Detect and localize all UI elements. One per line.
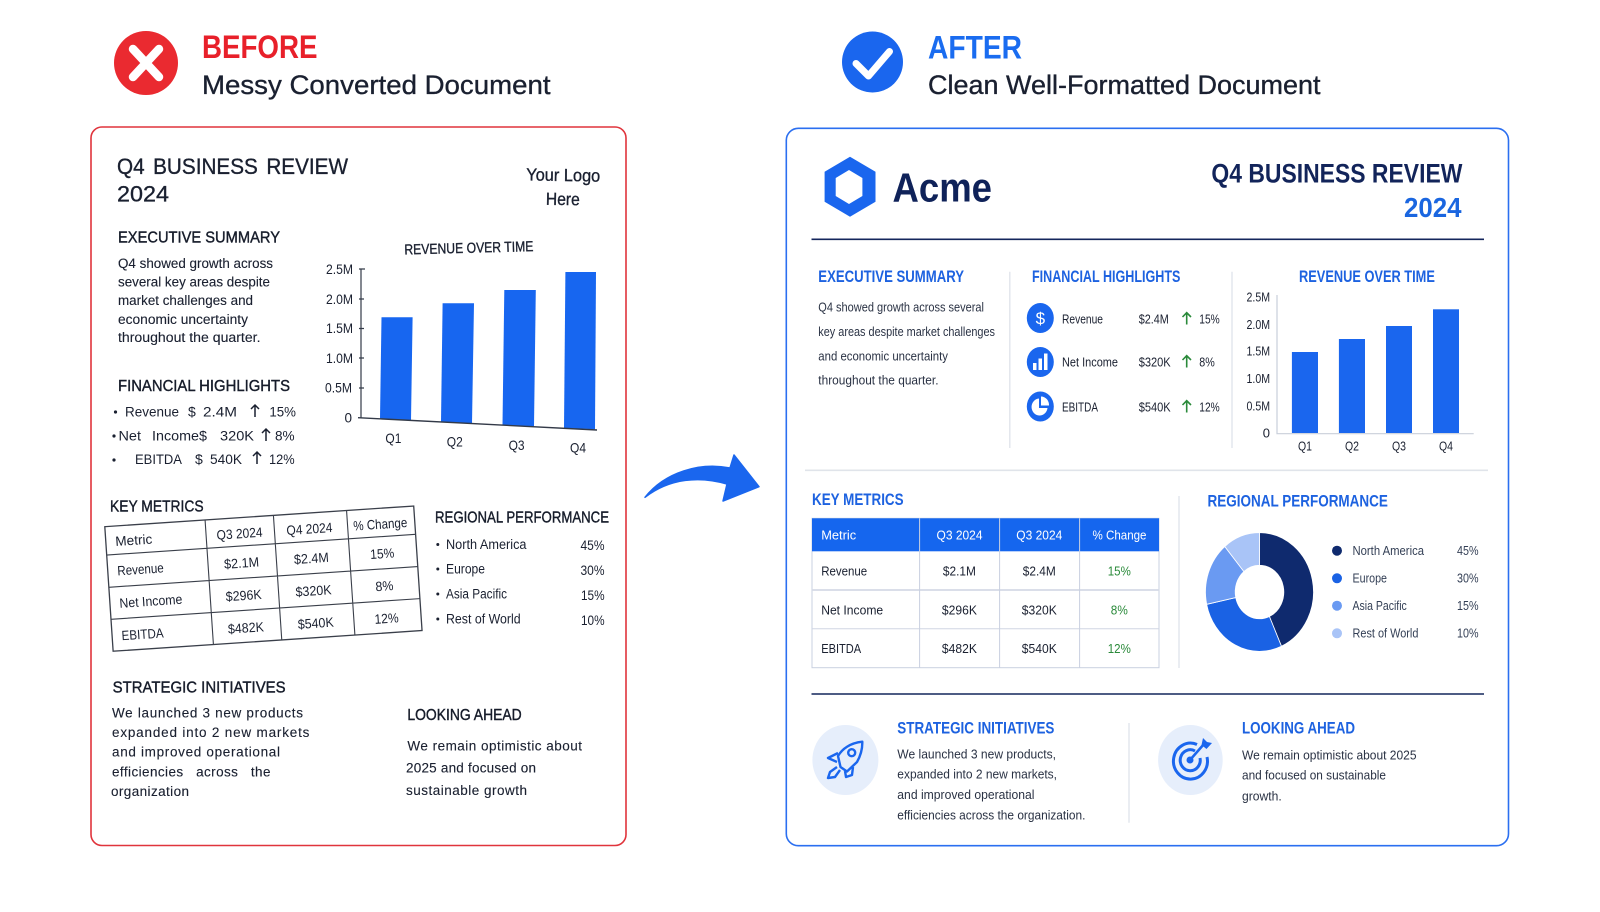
clean title: 2024 [1404, 192, 1462, 223]
clean bar chart: Q3 [1392, 439, 1406, 454]
clean bar chart: 1.5M [1246, 344, 1270, 359]
clean bar chart: Q2 [1345, 439, 1359, 454]
messy regional performance [435, 510, 609, 628]
clean regional performance: REGIONAL PERFORMANCE [1208, 493, 1388, 511]
messy looking ahead: LOOKING AHEAD [407, 707, 522, 724]
logo: Acme [825, 157, 992, 217]
donut legend: 30% [1457, 571, 1479, 586]
messy financial highlights: 540K [210, 451, 243, 467]
clean table: $296K [942, 602, 977, 617]
donut legend: Europe [1352, 571, 1387, 586]
clean executive summary: EXECUTIVE SUMMARY [818, 268, 964, 286]
messy skewed table: 12% [374, 610, 399, 627]
donut legend: 15% [1457, 598, 1479, 613]
messy strategic initiatives: STRATEGIC INITIATIVES [113, 680, 286, 697]
messy financial highlights: $ [195, 451, 203, 467]
messy skewed table: Metric [115, 532, 153, 549]
messy title: Q4 BUSINESS REVIEW [117, 154, 349, 179]
messy strategic initiatives: organization [111, 784, 189, 799]
logo: Acme: Acme [892, 165, 992, 211]
messy title [117, 154, 349, 207]
messy strategic initiatives: efficiencies across the [112, 765, 270, 780]
messy skewed table: 15% [370, 545, 395, 562]
messy skewed table: $320K [295, 582, 332, 600]
clean financial highlights: $540K [1139, 399, 1171, 414]
messy bar chart: 0.5M [325, 381, 352, 396]
clean strategic initiatives: We launched 3 new products, [897, 746, 1056, 761]
panel: messy document [91, 127, 626, 846]
clean executive summary: key areas despite market challenges [818, 324, 995, 339]
clean table: $2.1M [943, 564, 976, 579]
messy bar chart: 1.5M [326, 321, 353, 336]
clean bar chart: 0.5M [1246, 398, 1270, 413]
messy executive summary: throughout the quarter. [118, 330, 260, 345]
icon: dollar: $ [1036, 309, 1046, 328]
clean bar chart: REVENUE OVER TIME [1299, 268, 1435, 286]
messy regional performance: 15% [581, 588, 605, 603]
clean financial highlights: EBITDA [1062, 399, 1098, 414]
messy strategic initiatives: and improved operational [112, 745, 280, 760]
clean financial highlights [1027, 268, 1220, 422]
icon: red cross [114, 31, 178, 95]
clean bar chart: Q1 [1298, 439, 1312, 454]
clean table: 15% [1108, 564, 1131, 579]
messy looking ahead: sustainable growth [406, 783, 527, 798]
messy executive summary: EXECUTIVE SUMMARY [118, 230, 280, 247]
clean bar chart: Q4 [1439, 439, 1453, 454]
messy regional performance: Asia Pacific [446, 586, 507, 601]
clean executive summary [818, 268, 995, 388]
messy title: 2024 [117, 182, 169, 207]
messy skewed table: EBITDA [121, 626, 164, 643]
clean financial highlights: Net Income [1062, 355, 1118, 370]
clean financial highlights: 15% [1199, 311, 1220, 326]
logo placeholder [526, 164, 600, 210]
messy bar chart: 1.0M [326, 351, 353, 366]
icon: dollar [1027, 303, 1054, 333]
messy regional performance: North America [446, 537, 527, 552]
messy bar chart: 2.5M [326, 262, 353, 277]
clean table: $2.4M [1023, 564, 1056, 579]
clean strategic initiatives: expanded into 2 new markets, [897, 767, 1057, 782]
messy skewed table: $540K [297, 615, 334, 632]
before subtitle: Messy Converted Document [202, 70, 551, 100]
after label: AFTER [928, 29, 1022, 65]
messy bar chart: 0 [344, 411, 352, 426]
after subtitle: Clean Well-Formatted Document [928, 70, 1321, 100]
messy financial highlights: EBITDA [135, 451, 183, 467]
clean financial highlights: $320K [1139, 355, 1171, 370]
clean financial highlights: 12% [1199, 399, 1220, 414]
messy regional performance: 45% [580, 538, 604, 553]
clean table: Q3 2024 [936, 527, 982, 542]
clean financial highlights: Revenue [1062, 311, 1103, 326]
clean title: Q4 BUSINESS REVIEW [1211, 158, 1463, 188]
messy financial highlights: FINANCIAL HIGHLIGHTS [118, 378, 290, 395]
messy executive summary [118, 230, 280, 345]
messy financial highlights [112, 378, 296, 467]
clean strategic initiatives: STRATEGIC INITIATIVES [897, 719, 1054, 737]
messy skewed table: $482K [227, 619, 264, 637]
arrow: before to after [645, 455, 759, 501]
messy executive summary: market challenges and [118, 293, 253, 308]
clean strategic initiatives: efficiencies across the organization. [897, 807, 1085, 822]
messy financial highlights: 2.4M [203, 404, 237, 420]
clean looking ahead: We remain optimistic about 2025 [1242, 747, 1416, 762]
clean financial highlights: 8% [1199, 355, 1215, 370]
donut legend: North America [1352, 543, 1425, 558]
logo placeholder: Your Logo [526, 164, 600, 186]
messy skewed table: $296K [225, 587, 262, 604]
clean key metrics heading: KEY METRICS [812, 491, 904, 509]
header: after [842, 29, 1321, 100]
clean table: $482K [942, 641, 977, 656]
messy strategic initiatives: expanded into 2 new markets [112, 725, 310, 740]
messy skewed table: Q3 2024 [216, 525, 263, 543]
clean executive summary: and economic uncertainty [818, 349, 948, 364]
messy regional performance: 30% [580, 563, 604, 578]
messy regional performance: 10% [581, 613, 605, 628]
messy regional performance: Europe [446, 562, 485, 577]
messy financial highlights: $ [188, 404, 196, 420]
clean strategic initiatives: and improved operational [897, 787, 1035, 802]
clean looking ahead [1158, 719, 1416, 804]
messy bar chart: 2.0M [326, 292, 353, 307]
donut legend: 10% [1457, 626, 1479, 641]
clean title [1211, 158, 1463, 223]
messy skewed table [105, 506, 422, 651]
messy executive summary: several key areas despite [118, 275, 270, 290]
messy bar chart: REVENUE OVER TIME [404, 239, 534, 258]
messy financial highlights: 8% [275, 428, 295, 444]
clean financial highlights: FINANCIAL HIGHLIGHTS [1032, 268, 1180, 286]
donut legend: Rest of World [1352, 626, 1418, 641]
donut legend: Asia Pacific [1352, 598, 1407, 613]
clean bar chart: 2.5M [1246, 290, 1270, 305]
logo placeholder: Here [546, 189, 580, 209]
clean table: Revenue [821, 564, 867, 579]
messy executive summary: Q4 showed growth across [118, 256, 273, 271]
clean table: $540K [1022, 641, 1057, 656]
messy skewed table: Q4 2024 [286, 520, 333, 538]
messy bar chart [325, 239, 597, 456]
header: before [114, 29, 551, 100]
clean financial highlights: $2.4M [1139, 311, 1169, 326]
clean bar chart: 0 [1263, 425, 1270, 440]
messy strategic initiatives [111, 680, 310, 799]
clean table: 12% [1108, 641, 1131, 656]
clean bar chart: 2.0M [1246, 317, 1270, 332]
icon: blue check [842, 32, 903, 92]
icon: pie [1027, 392, 1054, 422]
messy bar chart: Q2 [447, 434, 463, 450]
messy bar chart: Q1 [385, 430, 402, 446]
clean table: $320K [1022, 602, 1057, 617]
clean regional performance [1205, 493, 1479, 651]
messy skewed table: 8% [375, 578, 394, 594]
messy financial highlights: 320K [220, 428, 255, 444]
clean table: % Change [1092, 527, 1146, 542]
clean table: Net Income [821, 602, 883, 617]
clean table [812, 518, 1159, 668]
clean looking ahead: LOOKING AHEAD [1242, 719, 1355, 737]
donut legend: 45% [1457, 543, 1479, 558]
clean table: EBITDA [821, 641, 861, 656]
donut legend [1332, 543, 1479, 641]
messy bar chart: Q4 [570, 440, 586, 456]
icon: target [1158, 725, 1223, 795]
before label: BEFORE [202, 29, 318, 65]
messy bar chart: Q3 [509, 437, 525, 453]
clean table: Q3 2024 [1016, 527, 1062, 542]
messy skewed table: Net Income [119, 592, 183, 611]
messy financial highlights: Income$ [152, 428, 207, 444]
messy financial highlights: Revenue [125, 404, 179, 420]
icon: rocket [812, 725, 878, 795]
messy executive summary: economic uncertainty [118, 312, 248, 327]
clean looking ahead: and focused on sustainable [1242, 767, 1386, 782]
clean executive summary: throughout the quarter. [818, 373, 938, 388]
clean table: 8% [1111, 602, 1128, 617]
messy skewed table: % Change [353, 515, 408, 534]
messy looking ahead: 2025 and focused on [406, 761, 536, 776]
messy skewed table: $2.4M [293, 550, 329, 567]
messy key metrics heading: KEY METRICS [110, 499, 204, 516]
messy regional performance: Rest of World [446, 611, 521, 626]
messy looking ahead [406, 707, 582, 798]
clean bar chart: 1.0M [1246, 371, 1270, 386]
icon: bars [1027, 347, 1054, 377]
messy financial highlights: Net [118, 428, 141, 444]
messy regional performance: REGIONAL PERFORMANCE [435, 510, 609, 527]
panel: clean document [786, 128, 1508, 846]
messy strategic initiatives: We launched 3 new products [112, 705, 303, 720]
messy financial highlights: 12% [269, 451, 295, 467]
messy looking ahead: We remain optimistic about [407, 738, 582, 753]
messy skewed table: $2.1M [224, 554, 260, 572]
clean bar chart [1246, 268, 1474, 454]
clean executive summary: Q4 showed growth across several [818, 300, 984, 315]
clean strategic initiatives [812, 719, 1085, 822]
messy skewed table: Revenue [117, 560, 164, 578]
clean looking ahead: growth. [1242, 789, 1282, 804]
messy financial highlights: 15% [269, 404, 296, 420]
clean table: Metric [821, 527, 857, 542]
donut chart [1205, 533, 1313, 651]
